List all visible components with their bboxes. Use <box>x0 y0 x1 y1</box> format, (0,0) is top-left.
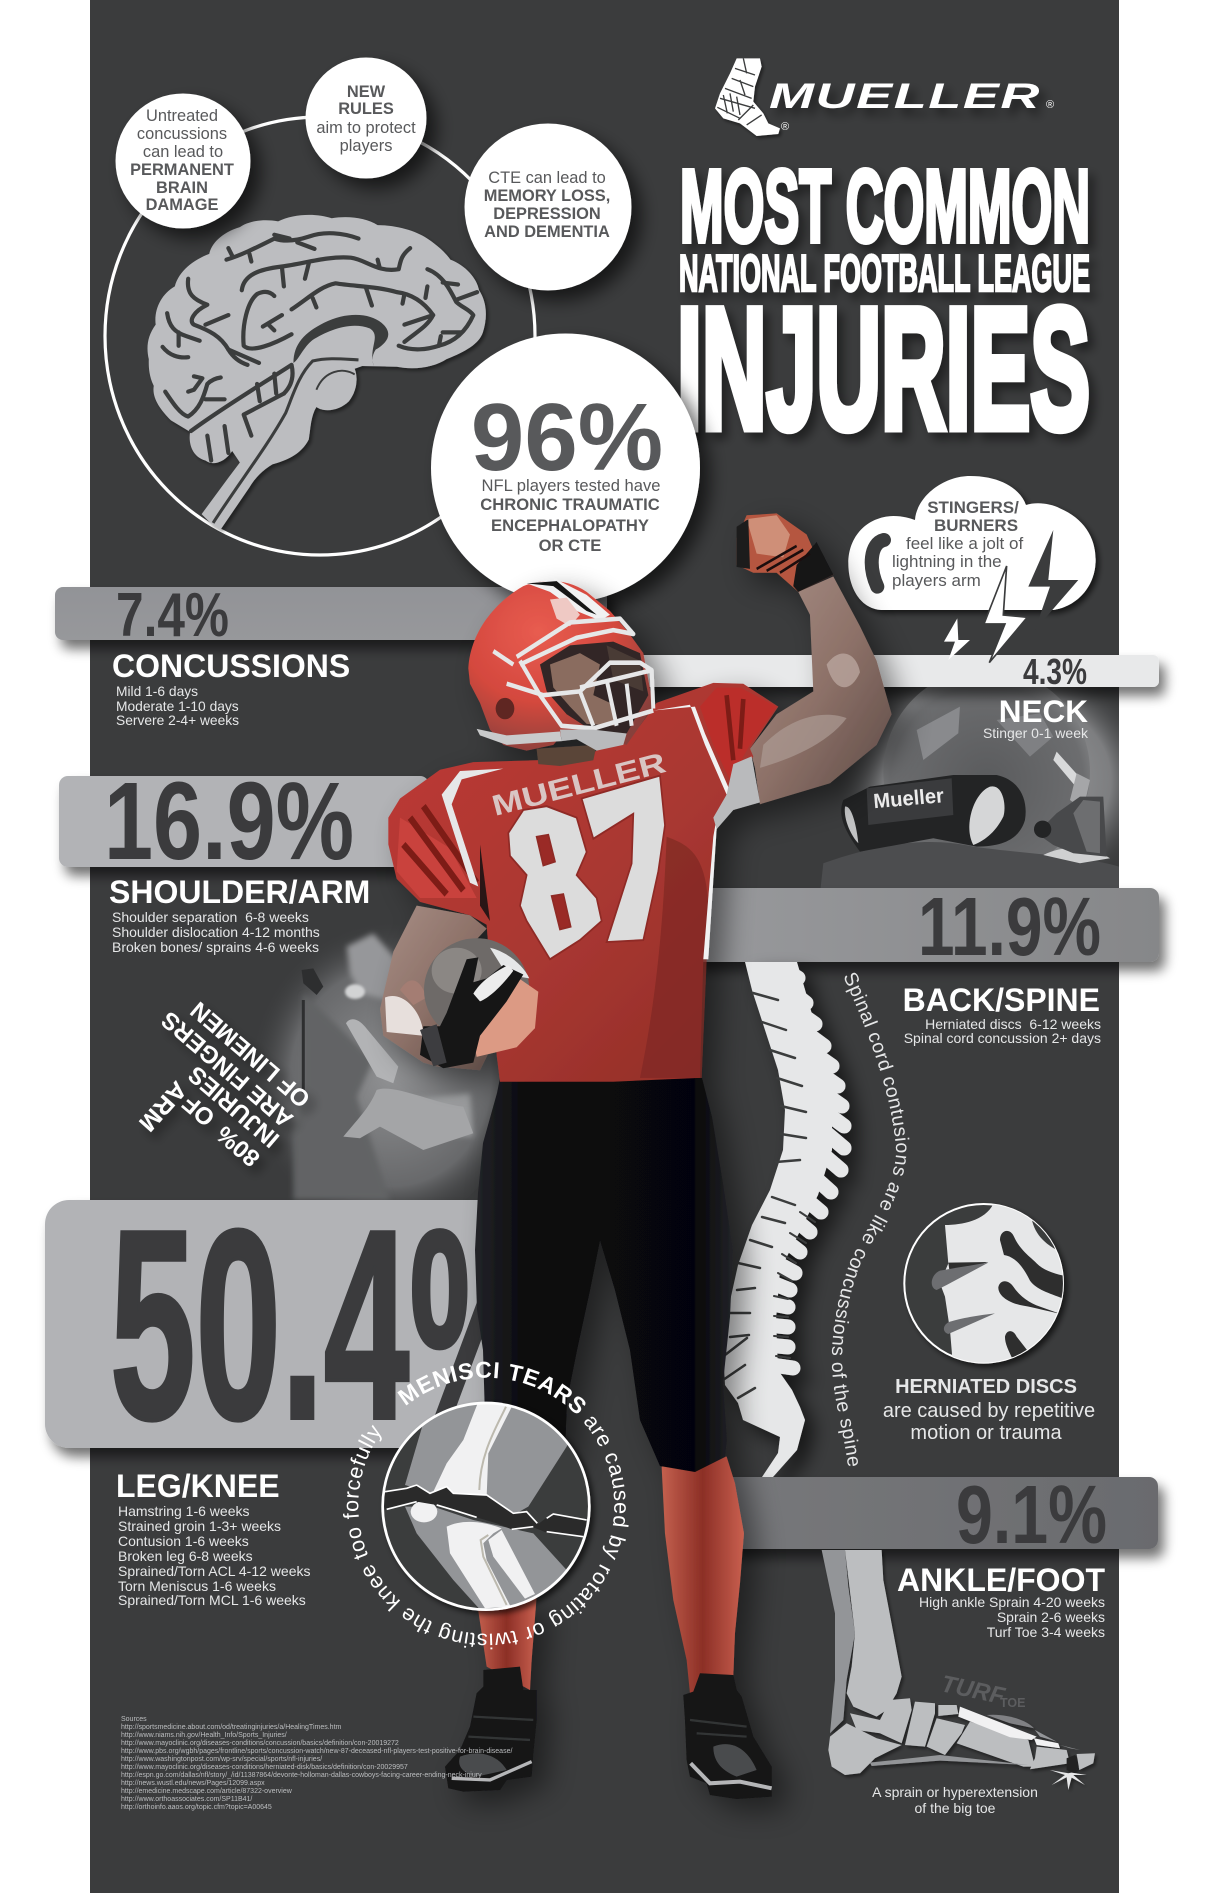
bar: 50.4% leg and knee <box>45 1175 546 1476</box>
heading: ankle and foot <box>897 1562 1105 1640</box>
thigh <box>405 1404 568 1512</box>
ankle recovery times: Turf Toe 3-4 weeks <box>987 1624 1105 1640</box>
shoulder recovery times: Broken bones/ sprains 4-6 weeks <box>112 939 319 955</box>
heading: ankle and foot: ANKLE/FOOT <box>897 1562 1105 1598</box>
brand wordmark: MUELLER: MUELLER <box>769 77 1041 116</box>
concussion recovery times: Servere 2-4+ weeks <box>116 713 239 728</box>
icon: white lightning bolt <box>984 566 1027 663</box>
callout text: aim to protect <box>316 119 416 137</box>
label: turf toe: TURF <box>939 1670 1008 1710</box>
callout text: BRAIN <box>156 179 208 197</box>
back recovery times: Herniated discs 6-12 weeks <box>925 1016 1101 1032</box>
cloud text: STINGERS/ <box>927 498 1019 517</box>
title <box>677 148 1090 465</box>
rotated callout: finger injuries <box>133 996 316 1172</box>
concussion recovery times: Mild 1-6 days <box>116 684 198 699</box>
shin <box>405 1507 567 1613</box>
stat description: OR CTE <box>539 536 601 555</box>
text: herniated discs <box>883 1376 1095 1444</box>
text: herniated discs: motion or trauma <box>910 1422 1062 1444</box>
leg recovery times: Torn Meniscus 1-6 weeks <box>118 1578 276 1594</box>
stat: 96%: 96% <box>471 384 663 491</box>
callout text: Untreated <box>146 107 218 125</box>
callout text: AND DEMENTIA <box>484 223 610 241</box>
ankle recovery times <box>919 1594 1105 1640</box>
football player <box>380 513 892 1799</box>
callout: untreated concussions <box>116 94 250 228</box>
icon: small lightning bolt <box>944 618 970 660</box>
sources: http://orthoinfo.aaos.org/topic.cfm?topic=A00645 <box>121 1804 272 1811</box>
white shoulder stripes <box>442 769 503 887</box>
herniated disc circle <box>904 1200 1067 1370</box>
leg recovery times: Sprained/Torn ACL 4-12 weeks <box>118 1563 310 1579</box>
neck recovery time: Stinger 0-1 week <box>983 725 1089 741</box>
callout text: MEMORY LOSS, <box>484 187 610 205</box>
registered marks: ® <box>1046 99 1054 111</box>
leg recovery times: Sprained/Torn MCL 1-6 weeks <box>118 1592 306 1608</box>
femur <box>433 1402 513 1497</box>
callout: stingers cloud <box>848 476 1096 663</box>
jersey wordmark: MUELLER <box>489 747 669 823</box>
callout text: players <box>340 137 392 155</box>
cloud text: lightning in the <box>892 552 1002 571</box>
label: turf toe: TOE <box>1000 1696 1025 1710</box>
concussion recovery times <box>116 684 239 728</box>
chin strap and cup <box>477 729 562 745</box>
heading: concussions <box>112 648 350 728</box>
toe pain burst <box>1050 1770 1087 1790</box>
raised arm <box>750 577 892 804</box>
text: herniated discs: are caused by repetitive <box>883 1400 1095 1422</box>
rotated callout: finger injuries: OF LINEMEN <box>186 996 316 1113</box>
bar: 7.4% concussions <box>55 581 607 650</box>
heading: leg and knee: LEG/KNEE <box>116 1468 280 1504</box>
heading: concussions: CONCUSSIONS <box>112 648 350 684</box>
ankle recovery times: Sprain 2-6 weeks <box>997 1609 1105 1625</box>
callout text: can lead to <box>143 143 223 161</box>
sources: Sources <box>121 1716 147 1723</box>
legs: socks and boots <box>445 1457 772 1799</box>
value: 4.3%: 4.3% <box>1023 651 1087 692</box>
callout text: NEW <box>347 83 386 101</box>
jersey shading <box>640 837 708 1078</box>
sources: http://www.pbs.org/wgbh/pages/frontline/sports/concussion-watch/new-87-deceased-nfl-players-test-positive-for-brain-disease/ <box>121 1748 512 1755</box>
value: 7.4%: 7.4% <box>116 581 229 650</box>
callout text: DEPRESSION <box>493 205 601 223</box>
leg recovery times: Strained groin 1-3+ weeks <box>118 1518 281 1534</box>
football <box>424 938 529 1042</box>
rotated callout: finger injuries: OF <box>178 1089 220 1131</box>
spine illustration <box>723 962 844 1477</box>
caption: turf toe: A sprain or hyperextension <box>872 1784 1038 1800</box>
curved text along spine: Spinal cord contusions are like concussions of the spine <box>832 972 910 1466</box>
text: herniated discs: HERNIATED DISCS <box>895 1376 1077 1398</box>
shoulder and arm illustration <box>266 930 500 1200</box>
sources: http://espn.go.com/dallas/nfl/story/_/id/11387864/devonte-holloman-dallas-cowboys-facing-career-ending-neck-injury <box>121 1772 482 1779</box>
pants <box>475 1078 733 1480</box>
icon: Mueller ankle logo <box>715 58 780 136</box>
spinal processes <box>768 970 844 1368</box>
heading: leg and knee <box>116 1468 310 1608</box>
leg recovery times: Hamstring 1-6 weeks <box>118 1503 250 1519</box>
rotated callout: finger injuries: 80% <box>211 1120 265 1172</box>
caption: turf toe: of the big toe <box>915 1800 996 1816</box>
callout: CTE effects <box>464 124 632 290</box>
value: 9.1%: 9.1% <box>956 1468 1107 1561</box>
value: 11.9%: 11.9% <box>918 880 1101 973</box>
spinal gaps between processes <box>774 1212 815 1358</box>
icon: brain <box>148 215 486 529</box>
helmet shell <box>468 581 653 751</box>
sources: http://www.mayoclinic.org/diseases-conditions/herniated-disk/basics/definition/con-20029957 <box>121 1764 408 1771</box>
sources: http://emedicine.medscape.com/article/87322-overview <box>121 1788 293 1795</box>
callout text: CTE can lead to <box>488 169 606 187</box>
value: 50.4%: 50.4% <box>110 1175 546 1476</box>
neck brace illustration: Mueller <box>872 784 945 813</box>
tibia <box>447 1522 511 1608</box>
foot skeleton illustration <box>822 1550 1095 1790</box>
upper body <box>380 513 892 1082</box>
corpus callosum <box>293 315 388 366</box>
fist and glove <box>737 513 833 592</box>
circular text around knee: MENISCI TEARS are caused by rotating or twisting the knee too forcefully <box>343 1362 629 1650</box>
value: 16.9%: 16.9% <box>104 760 354 883</box>
concussion recovery times: Moderate 1-10 days <box>116 699 239 714</box>
stat description: NFL players tested have <box>482 476 660 495</box>
jersey number 87 <box>508 776 665 959</box>
glove and hand <box>473 975 538 1057</box>
leg recovery times <box>118 1503 310 1608</box>
stat description: ENCEPHALOPATHY <box>491 516 649 535</box>
vertebra separations <box>723 993 806 1398</box>
heading: shoulder and arm <box>109 874 370 955</box>
cerebellum divider and folia <box>191 365 293 431</box>
sources: http://sportsmedicine.about.com/od/treatinginjuries/a/HealingTimes.htm <box>121 1724 342 1731</box>
rotated callout: finger injuries: ARM <box>133 1075 192 1137</box>
bar: 11.9% back and spine <box>690 880 1159 973</box>
leg recovery times: Contusion 1-6 weeks <box>118 1533 249 1549</box>
facemask <box>493 619 653 728</box>
tear <box>383 1484 588 1538</box>
icon: dark lightning bolt <box>1028 530 1078 630</box>
back recovery times <box>904 1016 1101 1046</box>
registered marks <box>781 99 1054 133</box>
ankle recovery times: High ankle Sprain 4-20 weeks <box>919 1594 1105 1610</box>
leg recovery times: Broken leg 6-8 weeks <box>118 1548 253 1564</box>
shoulder recovery times: Shoulder dislocation 4-12 months <box>112 924 320 940</box>
caption: turf toe <box>872 1784 1038 1816</box>
heading: back and spine <box>903 982 1101 1046</box>
bar: 9.1% ankle and foot <box>725 1468 1158 1561</box>
cloud text <box>892 498 1023 590</box>
knee illustration circle <box>383 1400 589 1613</box>
neck <box>537 745 597 766</box>
heading: neck: NECK <box>999 693 1088 729</box>
heading: shoulder and arm: SHOULDER/ARM <box>109 874 370 910</box>
callout text: DAMAGE <box>146 196 218 214</box>
face <box>540 642 648 733</box>
shoulder recovery times: Shoulder separation 6-8 weeks <box>112 909 309 925</box>
sources: http://www.washingtonpost.com/wp-srv/special/sports/nfl-injuries/ <box>121 1756 322 1763</box>
back recovery times: Spinal cord concussion 2+ days <box>904 1030 1101 1046</box>
brand wordmark: MUELLER <box>769 77 1054 133</box>
rotated callout: finger injuries: INJURIES <box>183 1060 285 1153</box>
cloud text: feel like a jolt of <box>906 534 1023 553</box>
helmet stripe <box>527 580 610 621</box>
callout: 96% of players <box>431 334 700 602</box>
brain folds <box>163 233 477 461</box>
undershirt at sleeve <box>713 756 760 829</box>
patella <box>411 1501 437 1522</box>
callout: new rules <box>306 58 426 178</box>
shoulder recovery times <box>112 909 320 955</box>
sources: http://news.wustl.edu/news/Pages/12099.aspx <box>121 1780 265 1787</box>
sources: http://www.orthoassociates.com/SP11B41/ <box>121 1796 252 1803</box>
callout text: concussions <box>137 125 227 143</box>
callout text: PERMANENT <box>130 161 234 179</box>
left forearm <box>380 906 493 1070</box>
rotated callout: finger injuries: ARE FINGERS <box>156 1006 298 1133</box>
callout text: RULES <box>338 100 394 118</box>
bar: 16.9% shoulder <box>59 760 429 883</box>
callout text <box>484 169 610 241</box>
cloud text: BURNERS <box>934 516 1018 535</box>
stat description: CHRONIC TRAUMATIC <box>480 495 660 514</box>
brain circle outline <box>105 117 535 555</box>
cloud text: players arm <box>892 571 981 590</box>
neck brace illustration <box>820 687 1119 888</box>
bar: 4.3% neck <box>630 651 1159 692</box>
right boot <box>683 1673 772 1799</box>
sources <box>121 1716 512 1811</box>
heading: back and spine: BACK/SPINE <box>903 982 1100 1018</box>
jersey <box>388 683 778 1082</box>
sources: http://www.mayoclinic.org/diseases-conditions/concussion/basics/definition/con-20019272 <box>121 1740 399 1747</box>
sleeve folds <box>397 818 477 898</box>
registered marks: ® <box>781 121 789 133</box>
left boot <box>445 1667 537 1792</box>
sources: http://www.niams.nih.gov/Health_Info/Sports_Injuries/ <box>121 1732 287 1739</box>
heading: neck <box>983 693 1089 741</box>
stat description <box>480 476 660 555</box>
callout text <box>316 83 416 155</box>
callout text <box>130 107 234 214</box>
